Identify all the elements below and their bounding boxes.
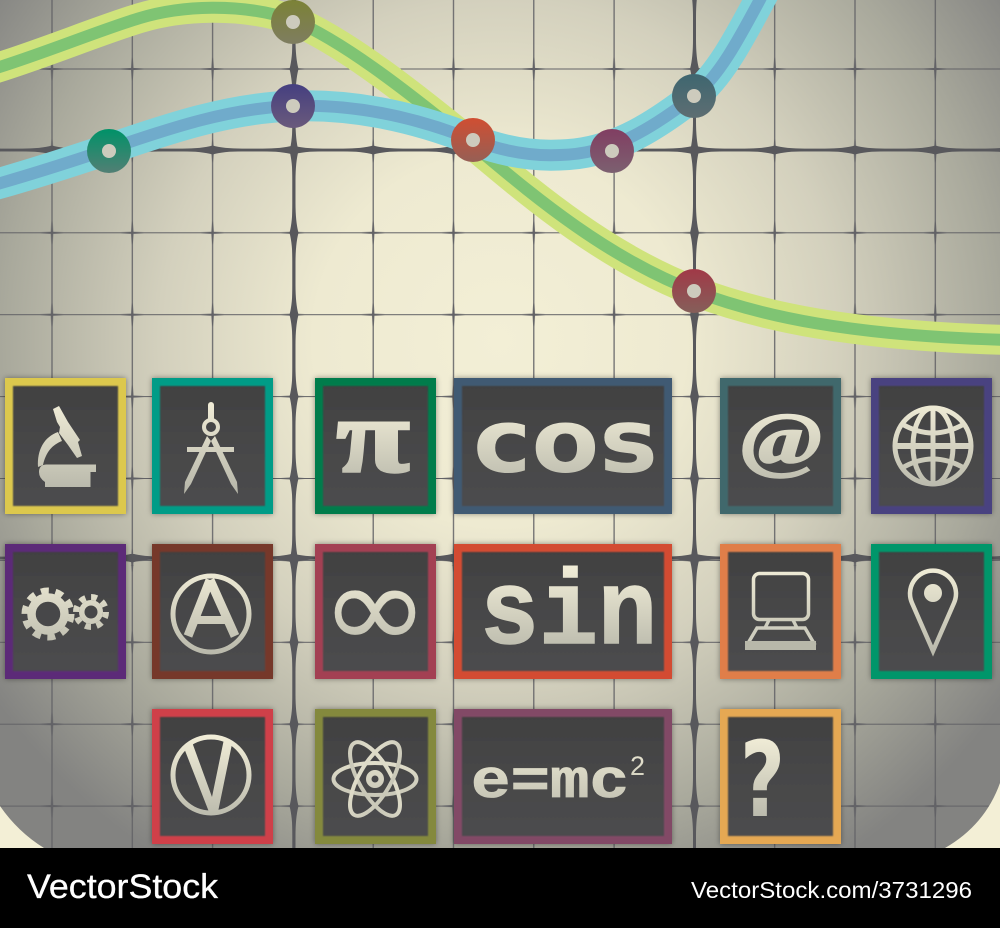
icon: gears: [24, 590, 106, 638]
icon: drawing compass: [184, 402, 238, 494]
tile: circled V: [152, 709, 273, 844]
tile: globe: [871, 378, 992, 514]
footer url: VectorStock.com/3731296: [691, 877, 972, 903]
tile: at sign: [720, 378, 841, 514]
icon: map pin: [910, 571, 956, 651]
tile: e=mc2: [454, 709, 672, 844]
tile: anarchy: [152, 544, 273, 679]
icon: circled A: [173, 576, 249, 652]
icon: circled V: [173, 737, 249, 813]
icon: atom: [334, 735, 416, 823]
marker: maroon: [672, 269, 716, 313]
text: sin: sin: [480, 555, 657, 675]
tile: map pin: [871, 544, 992, 679]
tile: cos: [454, 378, 672, 514]
tile: infinity: [315, 538, 436, 679]
icon: microscope: [38, 406, 96, 487]
footer brand: VectorStock: [27, 868, 219, 906]
icon: at sign: @: [741, 399, 822, 481]
text: formula: 2: [630, 751, 645, 781]
tile: microscope: [5, 378, 126, 514]
bottom left panel corner: [0, 806, 44, 848]
tile: pi: [315, 378, 436, 514]
marker: purple: [271, 84, 315, 128]
chart: green line: [0, 8, 1000, 340]
marker: red: [451, 118, 495, 162]
tile: computer: [720, 544, 841, 679]
marker: teal: [672, 74, 716, 118]
icon: question mark: ?: [740, 719, 785, 841]
icon: pi symbol: π: [337, 379, 409, 494]
tile: sin: [454, 544, 672, 679]
chart: blue line: [0, 0, 764, 186]
tile: question mark: [720, 709, 841, 844]
marker: mauve: [590, 129, 634, 173]
marker: olive: [271, 0, 315, 44]
text: cos: cos: [473, 390, 658, 493]
footer bar: [0, 848, 1000, 928]
tile: compass: [152, 378, 273, 514]
text: formula: e=mc: [471, 751, 629, 814]
tile: gears: [5, 544, 126, 679]
bottom right panel corner: [945, 783, 1000, 848]
icon: computer: [745, 574, 816, 650]
icon: infinity: ∞: [321, 538, 429, 676]
marker: green: [87, 129, 131, 173]
tile: atom: [315, 709, 436, 844]
icon: globe: [895, 408, 971, 484]
